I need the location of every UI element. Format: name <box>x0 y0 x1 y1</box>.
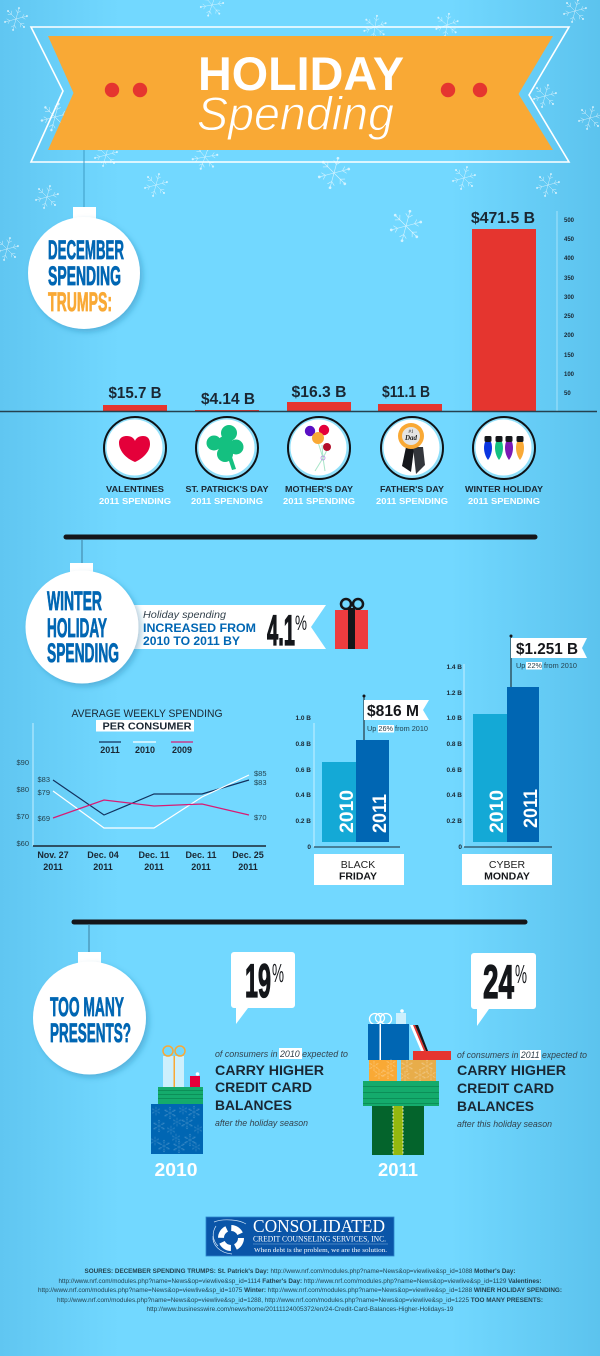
line chart: average weekly spending: $80 <box>16 785 29 794</box>
bar chart: holiday spending: 500 <box>564 218 575 224</box>
text block: 2010 credit card: CARRY HIGHER <box>215 1063 324 1078</box>
icon: father's day ribbon <box>381 417 443 479</box>
category labels: WINTER HOLIDAY <box>465 484 543 494</box>
text block: 2011 credit card <box>457 1050 587 1129</box>
bar chart: Cyber Monday: 0 <box>458 844 462 851</box>
bar chart: holiday spending <box>0 210 597 412</box>
icon: flowers <box>288 417 350 479</box>
bar chart: Cyber Monday: MONDAY <box>484 870 530 882</box>
bar chart: Cyber Monday: 0.4 B <box>446 792 462 799</box>
ornament: winter holiday spending: HOLIDAY <box>47 613 107 643</box>
callout: 19%: 19 <box>245 954 271 1007</box>
ornament: winter holiday spending: WINTER <box>47 586 102 616</box>
icon: heart <box>104 417 166 479</box>
category labels: FATHER'S DAY <box>380 484 444 494</box>
bar chart: Black Friday: 0.6 B <box>295 767 311 774</box>
bar chart: holiday spending: 150 <box>564 353 575 359</box>
bar chart: holiday spending: $11.1 B <box>382 384 430 401</box>
bar chart: holiday spending: 250 <box>564 314 575 320</box>
line chart: average weekly spending: Dec. 11 <box>185 850 217 860</box>
title text <box>197 48 404 140</box>
logo: Consolidated Credit Counseling Services: CREDIT COUNSELING SERVICES, INC. <box>253 1234 386 1244</box>
callout: 24%: % <box>515 959 527 989</box>
bar chart: holiday spending: $15.7 B <box>108 385 162 402</box>
bar chart: Cyber Monday: 2011 <box>521 789 542 828</box>
bar chart: Cyber Monday: 2010 <box>487 790 508 833</box>
bar chart: Black Friday: 0 <box>307 844 311 851</box>
category labels: 2011 SPENDING <box>468 496 540 506</box>
category labels: 2011 SPENDING <box>376 496 448 506</box>
callout: 24%: 24 <box>483 955 514 1008</box>
line chart: average weekly spending: 2009 <box>172 745 192 755</box>
line chart: average weekly spending: $85 <box>254 769 267 778</box>
ornament: December spending trumps <box>28 207 140 329</box>
ornament: too many presents: TOO MANY <box>50 992 124 1022</box>
icon: 2011 gift stack <box>363 1009 451 1155</box>
text block: 2011 credit card: after this holiday season <box>457 1119 552 1129</box>
text block: 2010 credit card: BALANCES <box>215 1098 292 1113</box>
bar chart: holiday spending: 100 <box>564 372 575 378</box>
bar chart: holiday spending: $4.14 B <box>201 391 255 408</box>
line chart: average weekly spending: Nov. 27 <box>37 850 69 860</box>
bar chart: holiday spending: 350 <box>564 276 575 282</box>
text block: 2010 credit card: CREDIT CARD <box>215 1080 312 1095</box>
line chart: average weekly spending: $60 <box>16 839 29 848</box>
title banner <box>31 27 569 162</box>
sources text: http://www.nrf.com/modules.php?name=News&op=viewlive&sp_id=1288, http://www.nrf.com/modules.php?name=News&op=viewlive&sp_id=1225 TOO MANY PRESENTS: <box>57 1297 543 1304</box>
bar chart: holiday spending: 400 <box>564 256 575 262</box>
text block: 2011 credit card: CREDIT CARD <box>457 1081 554 1096</box>
callout: 19% <box>231 952 295 1024</box>
ribbon: 4.1% increase: 4.1 <box>267 607 295 655</box>
ribbon: 4.1% increase <box>130 605 326 655</box>
line chart: average weekly spending: Dec. 25 <box>232 850 264 860</box>
bar chart: Black Friday: 0.2 B <box>295 818 311 825</box>
sources text: http://www.businesswire.com/news/home/20111124005372/en/24-Credit-Card-Balances-Higher-Holidays-19 <box>146 1306 454 1313</box>
bar chart: Cyber Monday: 1.2 B <box>446 690 462 697</box>
bar chart: holiday spending: $16.3 B <box>292 384 346 401</box>
bar chart: holiday spending: 300 <box>564 295 575 301</box>
line chart: average weekly spending: Dec. 11 <box>138 850 170 860</box>
line chart: average weekly spending: $83 <box>37 775 50 784</box>
callout: 24% <box>471 953 536 1026</box>
line chart: average weekly spending: $79 <box>37 788 50 797</box>
icon: 2010 gift stack <box>151 1046 203 1154</box>
icon: holiday lights <box>473 417 535 479</box>
logo: Consolidated Credit Counseling Services: CONSOLIDATED <box>253 1216 385 1236</box>
line chart: average weekly spending: 2011 <box>144 862 164 872</box>
ornament: December spending trumps: SPENDING <box>48 261 121 291</box>
logo: Consolidated Credit Counseling Services: When debt is the problem, we are the solution. <box>254 1247 387 1254</box>
category labels: MOTHER'S DAY <box>285 484 353 494</box>
line chart: average weekly spending: 2011 <box>93 862 113 872</box>
bar chart: holiday spending: 50 <box>564 391 571 397</box>
category labels: VALENTINES <box>106 484 164 494</box>
ornament: too many presents <box>33 952 146 1074</box>
bar chart: Black Friday <box>295 694 429 885</box>
text block: 2011 credit card: of consumers in 2011 expected to <box>457 1050 587 1060</box>
bar chart: holiday spending: $471.5 B <box>471 210 535 227</box>
bar chart: Black Friday: 0.4 B <box>295 792 311 799</box>
ornament: December spending trumps: TRUMPS: <box>48 287 112 317</box>
category labels: 2011 SPENDING <box>191 496 263 506</box>
line chart: average weekly spending: $83 <box>254 778 267 787</box>
icon: clover <box>196 417 258 479</box>
bar chart: Cyber Monday: 0.2 B <box>446 818 462 825</box>
bar chart: Cyber Monday: 1.4 B <box>446 664 462 671</box>
bar chart: Cyber Monday: 0.8 B <box>446 741 462 748</box>
bar chart: Black Friday: 1.0 B <box>295 715 311 722</box>
line chart: average weekly spending <box>16 708 267 872</box>
bar chart: holiday spending: 450 <box>564 237 575 243</box>
line chart: average weekly spending: PER CONSUMER <box>102 722 192 732</box>
sources text: SOURES: DECEMBER SPENDING TRUMPS: St. Patrick's Day: http://www.nrf.com/modules.php?name=News&op=viewlive&sp_id=1088 Mother's Day: <box>84 1268 516 1275</box>
ribbon: 4.1% increase: % <box>295 612 307 635</box>
bar chart: Black Friday: $816 M <box>367 703 419 720</box>
icon: father's day ribbon: Dad <box>404 434 418 442</box>
line chart: average weekly spending: 2011 <box>100 745 120 755</box>
text block: 2010 credit card: of consumers in 2010 expected to <box>215 1049 348 1059</box>
bar chart: holiday spending: 200 <box>564 333 575 339</box>
bar chart: Cyber Monday: Up 22% from 2010 <box>516 663 577 670</box>
ribbon: 4.1% increase: 2010 TO 2011 BY <box>143 636 240 648</box>
bar chart: Cyber Monday <box>446 634 587 885</box>
category labels: ST. PATRICK'S DAY <box>186 484 269 494</box>
text block: 2011 credit card: CARRY HIGHER <box>457 1063 566 1078</box>
sources text: http://www.nrf.com/modules.php?name=News&op=viewlive&sp_id=1075 Winter: http://www.nrf.com/modules.php?name=News&op=viewlive&sp_id=1288 WINER HOLIDAY SPENDING: <box>38 1287 562 1294</box>
line chart: average weekly spending: $90 <box>16 758 29 767</box>
text block: 2011 credit card: BALANCES <box>457 1099 534 1114</box>
line chart: average weekly spending: $70 <box>254 813 267 822</box>
line chart: average weekly spending: $70 <box>16 812 29 821</box>
sources text: http://www.nrf.com/modules.php?name=News&op=viewlive&sp_id=1114 Father's Day: http://www.nrf.com/modules.php?name=News&op=viewlive&sp_id=1129 Valentines: <box>58 1278 541 1285</box>
bar chart: Black Friday: BLACK <box>341 859 375 871</box>
bar chart: Cyber Monday: 1.0 B <box>446 715 462 722</box>
text block: 2010 credit card: after the holiday season <box>215 1118 308 1128</box>
callout: 19%: % <box>272 958 284 988</box>
line chart: average weekly spending: 2010 <box>135 745 155 755</box>
category labels: 2011 SPENDING <box>99 496 171 506</box>
bar chart: Black Friday: 2010 <box>337 790 358 833</box>
label: 2011: 2011 <box>378 1160 418 1180</box>
line chart: average weekly spending: AVERAGE WEEKLY SPENDING <box>72 708 222 720</box>
line chart: average weekly spending: 2011 <box>191 862 211 872</box>
bar chart: Black Friday: 2011 <box>370 794 391 833</box>
title text: Spending <box>197 87 394 140</box>
ribbon: 4.1% increase: Holiday spending <box>143 609 226 621</box>
category labels: 2011 SPENDING <box>283 496 355 506</box>
category labels <box>99 484 543 506</box>
ornament string <box>83 150 85 207</box>
icon: father's day ribbon: #1 <box>408 430 414 435</box>
title text: HOLIDAY <box>198 48 404 101</box>
bar chart: Black Friday: Up 26% from 2010 <box>367 726 428 733</box>
bar chart: Cyber Monday: 0.6 B <box>446 767 462 774</box>
bar chart: Cyber Monday: CYBER <box>489 859 525 871</box>
label: 2010: 2010 <box>154 1160 198 1180</box>
bar chart: Cyber Monday: $1.251 B <box>516 641 578 658</box>
text block: 2010 credit card <box>215 1048 348 1128</box>
bar chart: Black Friday: 0.8 B <box>295 741 311 748</box>
icon: gift <box>335 599 368 649</box>
ornament: December spending trumps: DECEMBER <box>48 235 124 265</box>
ornament: winter holiday spending <box>26 563 138 684</box>
logo: Consolidated Credit Counseling Services <box>206 1216 394 1256</box>
line chart: average weekly spending: 2011 <box>238 862 258 872</box>
ornament: winter holiday spending: SPENDING <box>47 638 119 668</box>
line chart: average weekly spending: Dec. 04 <box>87 850 119 860</box>
ribbon: 4.1% increase: INCREASED FROM <box>143 623 256 635</box>
ornament: too many presents: PRESENTS? <box>50 1018 131 1048</box>
line chart: average weekly spending: $69 <box>37 814 50 823</box>
line chart: average weekly spending: 2011 <box>43 862 63 872</box>
bar chart: Black Friday: FRIDAY <box>339 870 377 882</box>
sources text <box>38 1268 562 1313</box>
